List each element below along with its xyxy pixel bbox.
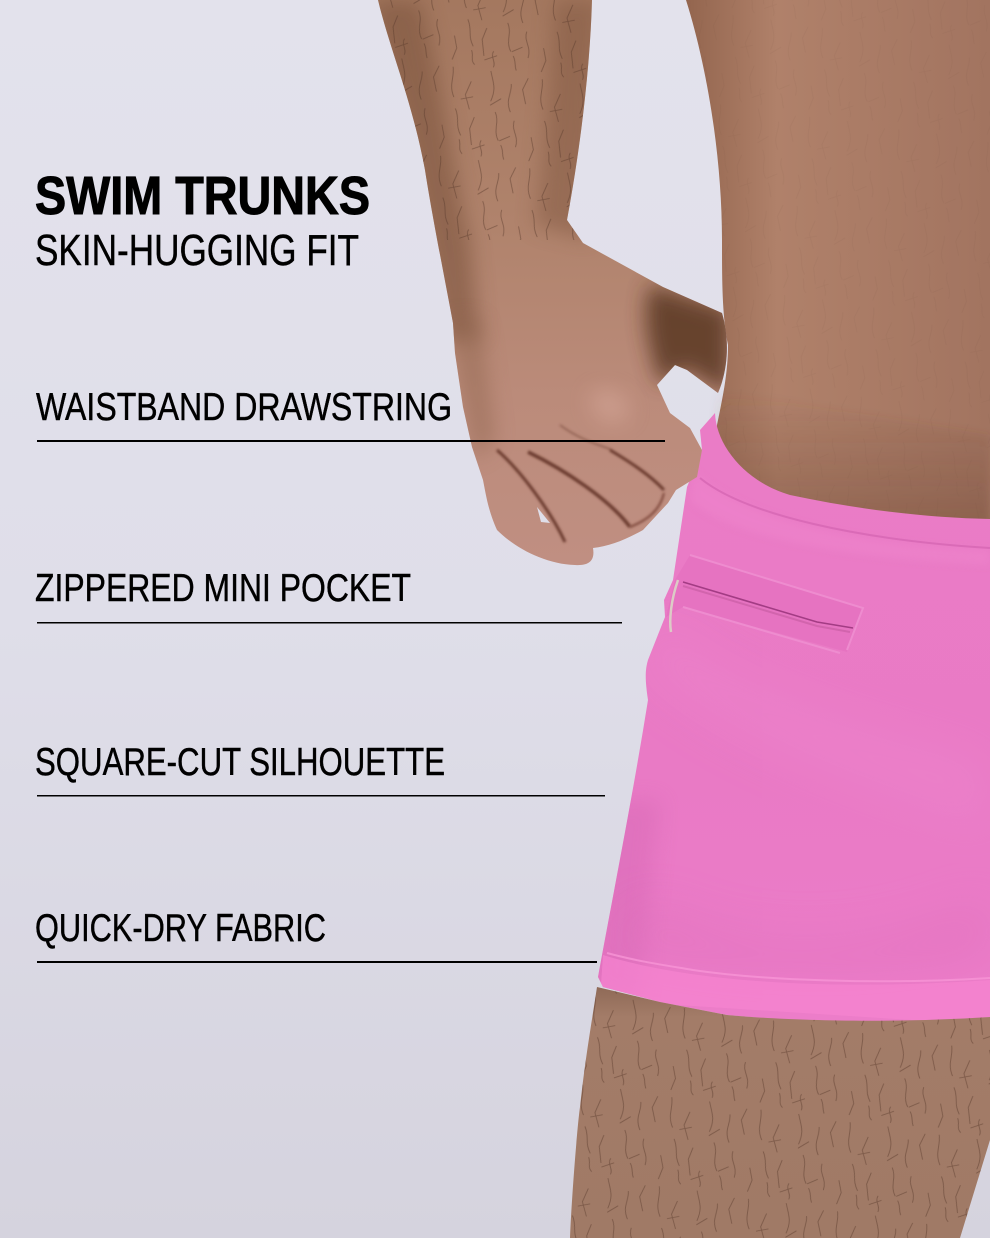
title: SWIM TRUNKS [35,166,370,226]
photo: arm and hand [370,0,730,565]
hand: knuckle highlight [594,390,626,420]
label: waistband drawstring: WAISTBAND DRAWSTRING [36,386,452,429]
photo: pink swim trunks [590,413,990,1025]
label: square-cut silhouette: SQUARE-CUT SILHOUETTE [35,741,445,784]
arm: edge shading [370,0,480,340]
trunks: hem stitch [607,953,990,981]
label: quick-dry fabric: QUICK-DRY FABRIC [35,907,326,950]
hand: finger creases [497,425,664,542]
hand: dark shadow at thumb web [646,285,730,395]
photo: torso [686,0,990,530]
hand: gap between fingers [537,507,550,523]
trunks: zippered pocket [666,555,863,653]
trunks: fabric shading [598,800,658,1002]
subtitle: SKIN-HUGGING FIT [35,226,359,275]
trunks: waistband stitch [700,478,990,548]
photo: thigh [570,987,990,1238]
hand: left shading [454,333,497,454]
hand: fingertip folds [630,493,664,527]
label: zippered mini pocket: ZIPPERED MINI POCKET [35,567,411,610]
arm: hair [378,0,592,240]
